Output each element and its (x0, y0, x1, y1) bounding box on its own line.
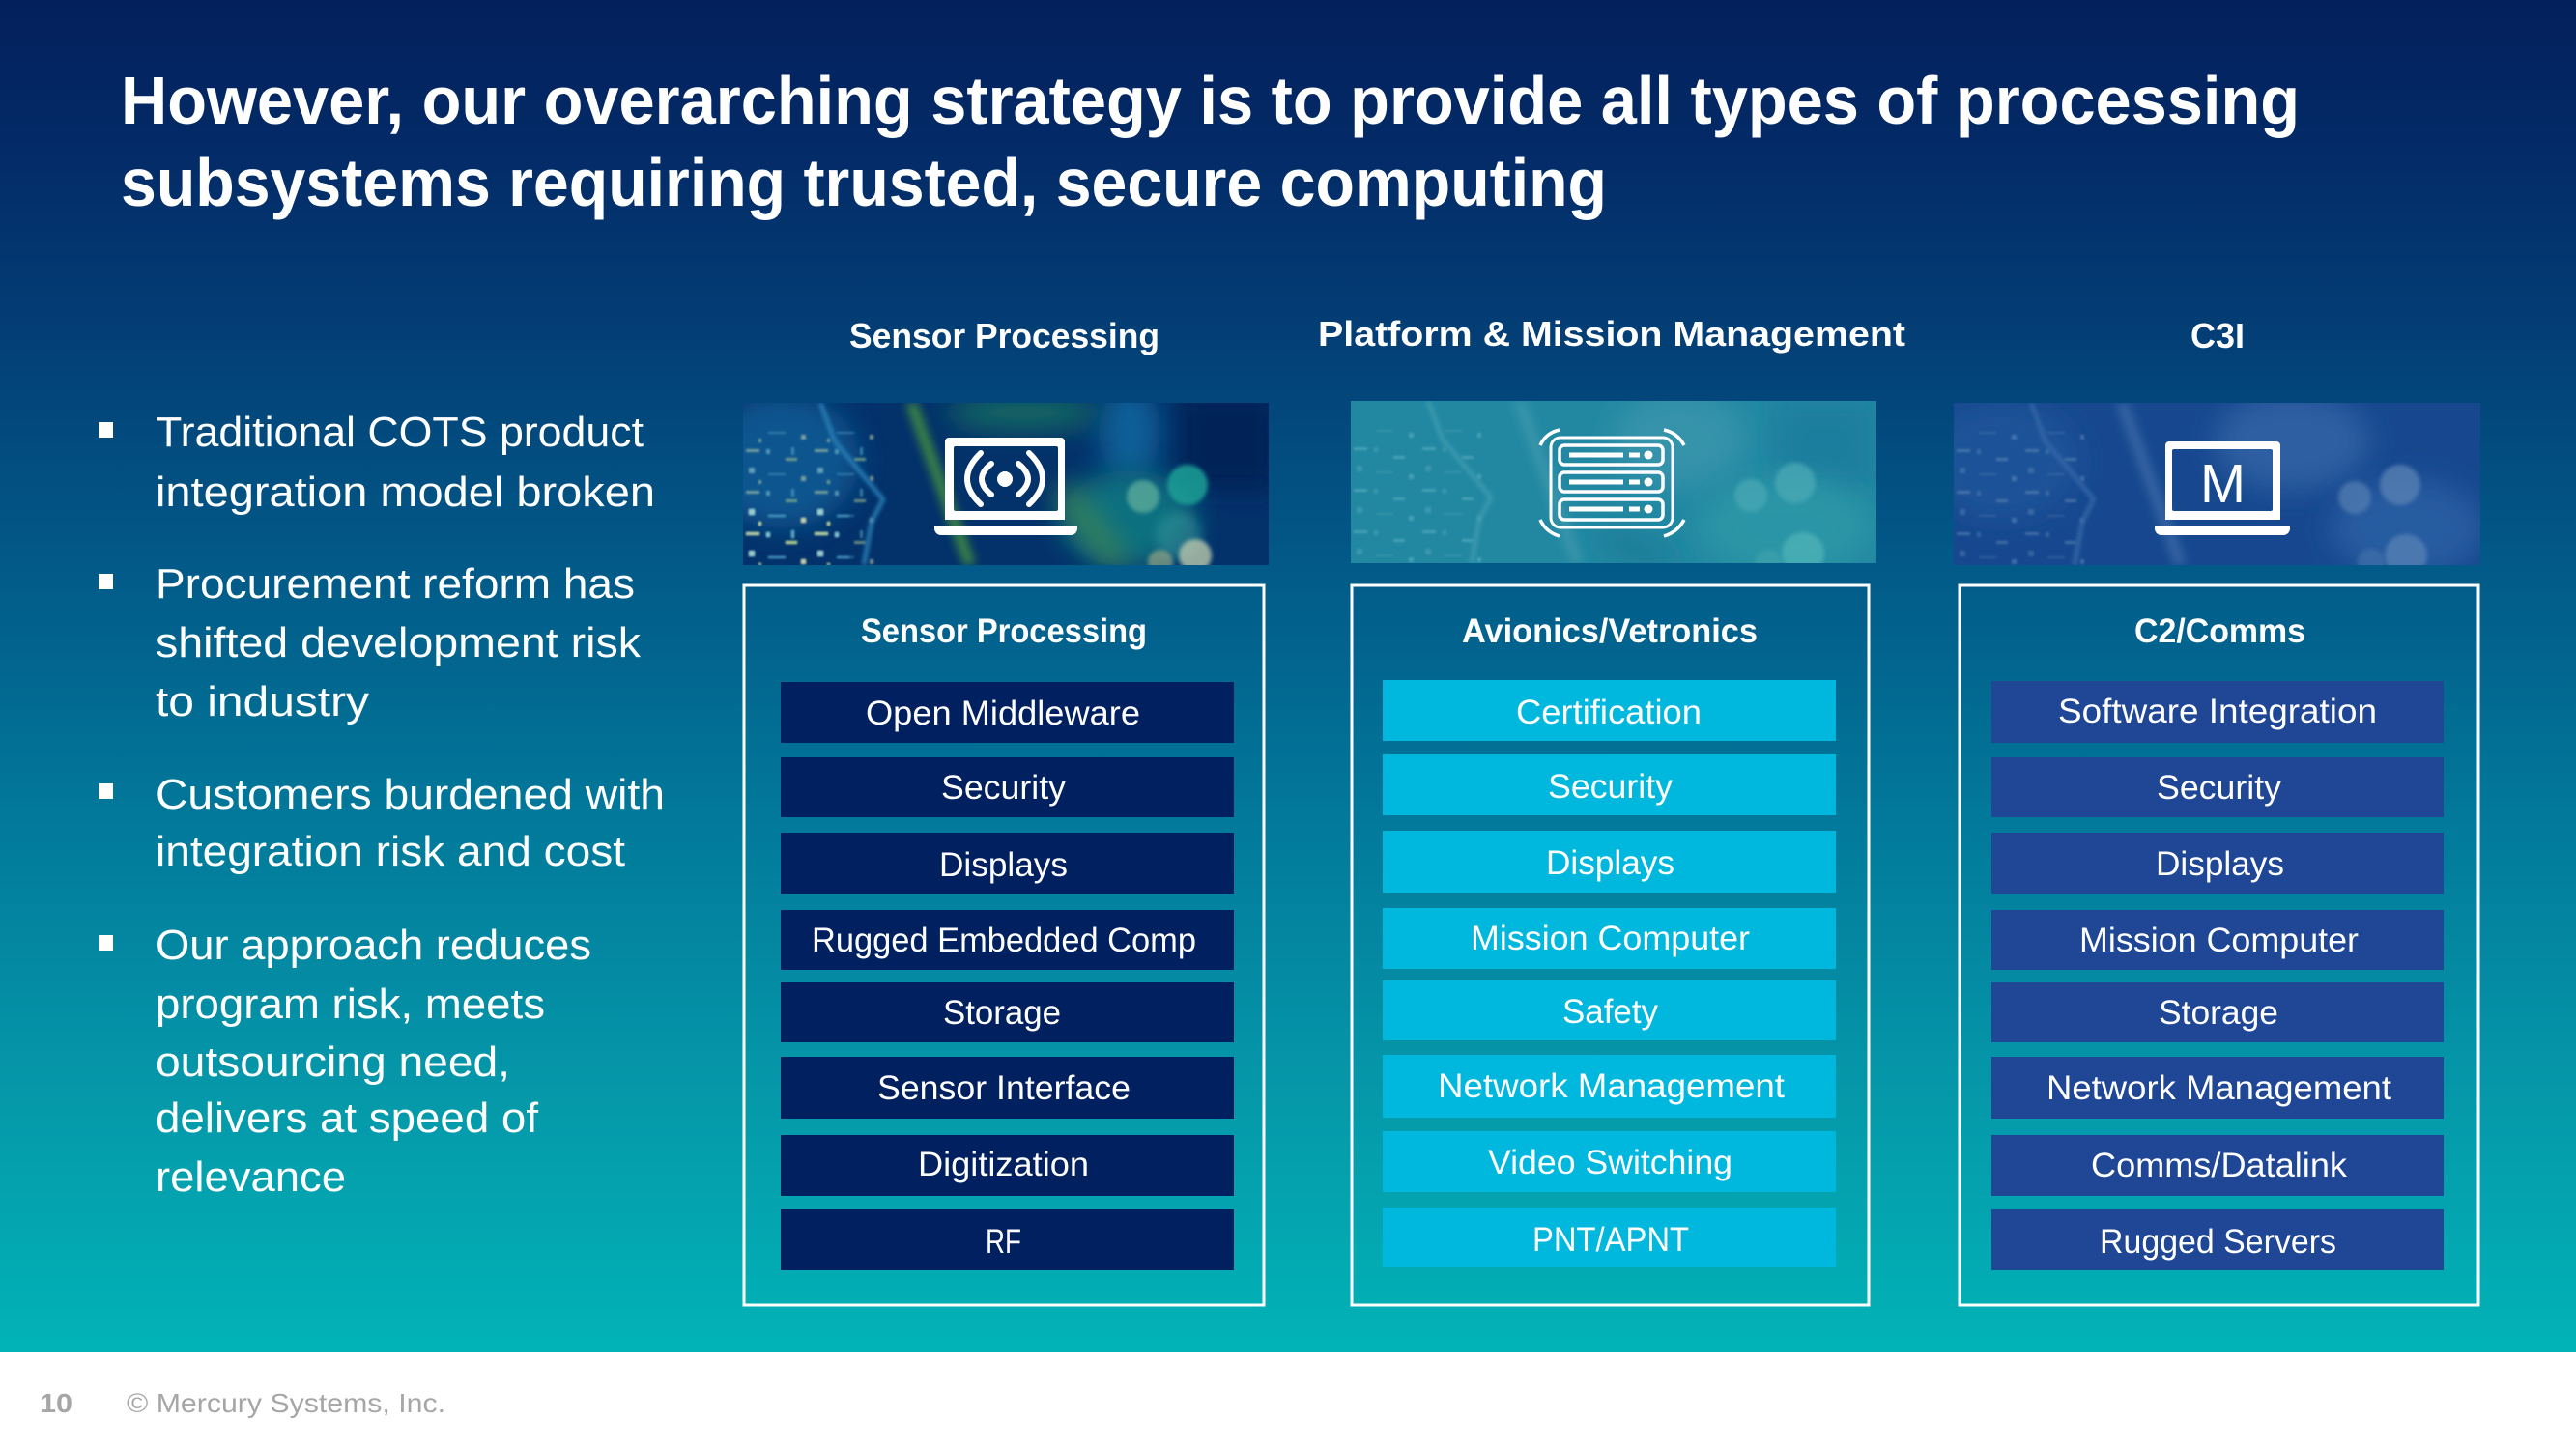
row list: avionics/vetronics: Video Switching (1488, 1144, 1732, 1181)
title: subsystems requiring trusted, secure computing (121, 145, 1607, 220)
row list: C2/Comms: Rugged Servers (2100, 1223, 2336, 1261)
row list: C2/Comms: Storage (2159, 994, 2278, 1032)
row list: sensor processing (781, 682, 1234, 1270)
row list: avionics/vetronics: PNT/APNT (1532, 1221, 1689, 1259)
copyright: © Mercury Systems, Inc. (127, 1388, 445, 1418)
row list: sensor processing: Open Middleware (866, 695, 1140, 732)
row list: C2/Comms: Software Integration (2058, 693, 2377, 730)
banner image: C3I (1954, 403, 2480, 565)
bullet: COTS model (99, 409, 655, 516)
bullet: procurement reform: shifted development risk (156, 619, 642, 667)
row list: avionics/vetronics: Mission Computer (1471, 920, 1750, 957)
bullet: our approach (99, 922, 591, 1201)
bullet: procurement reform (99, 560, 642, 725)
footer (40, 1388, 445, 1418)
icon: laptop with signal (934, 438, 1077, 535)
bullet: our approach: relevance (156, 1153, 346, 1201)
bullet: customers burdened (99, 771, 665, 875)
bullet: procurement reform: Procurement reform has (156, 560, 635, 608)
box outline: sensor processing list (744, 585, 1264, 1305)
row list: avionics/vetronics: Security (1548, 768, 1674, 806)
row list: sensor processing: Rugged Embedded Comp (812, 922, 1196, 959)
heading: platform and mission management: Platform & Mission Management (1318, 314, 1905, 354)
banner image: platform and mission management (1351, 401, 1876, 563)
bullet: customers burdened: integration risk and cost (156, 828, 625, 875)
panel: platform and mission management (1318, 314, 1905, 1305)
bullet: our approach: delivers at speed of (156, 1094, 539, 1142)
bullet: our approach: outsourcing need, (156, 1038, 510, 1086)
bullet: COTS model: integration model broken (156, 469, 655, 516)
row list: avionics/vetronics: Network Management (1438, 1067, 1785, 1105)
row list: C2/Comms: Mission Computer (2079, 922, 2359, 959)
row list: sensor processing: Displays (939, 846, 1068, 884)
box heading: C2/Comms: C2/Comms (2134, 612, 2305, 650)
title: However, our overarching strategy is to provide all types of processing (121, 63, 2300, 138)
row list: sensor processing: Digitization (918, 1146, 1089, 1183)
box outline: C2/Comms list (1960, 585, 2478, 1305)
row list: C2/Comms: Comms/Datalink (2091, 1147, 2348, 1184)
box heading: avionics/vetronics: Avionics/Vetronics (1462, 612, 1758, 650)
row list: sensor processing: Sensor Interface (877, 1069, 1131, 1107)
panel: C3I (1925, 316, 2485, 1305)
title (121, 63, 2300, 220)
row list: avionics/vetronics (1383, 680, 1836, 1267)
icon: laptop with M: M (2200, 453, 2246, 515)
row list: sensor processing: Storage (943, 994, 1061, 1032)
icon: server rack (1540, 430, 1684, 536)
row list: sensor processing: Security (941, 769, 1067, 807)
row list: C2/Comms: Network Management (2046, 1069, 2391, 1107)
bullet: procurement reform: to industry (156, 678, 369, 725)
panel: sensor processing (704, 316, 1278, 1305)
bullet: COTS model: Traditional COTS product (156, 409, 644, 456)
bullet: our approach: Our approach reduces (156, 922, 591, 969)
bullet list (99, 409, 665, 1201)
icon: laptop with M (2155, 441, 2290, 535)
heading: C3I: C3I (2190, 316, 2245, 355)
row list: sensor processing: RF (986, 1223, 1021, 1261)
banner image: sensor processing (743, 403, 1269, 565)
page number: 10 (40, 1388, 72, 1418)
bullet: customers burdened: Customers burdened with (156, 771, 665, 818)
heading: sensor processing: Sensor Processing (849, 316, 1159, 355)
row list: avionics/vetronics: Displays (1546, 844, 1674, 882)
box outline: avionics list (1352, 585, 1869, 1305)
row list: avionics/vetronics: Safety (1562, 993, 1658, 1031)
row list: C2/Comms: Displays (2156, 845, 2284, 883)
row list: C2/Comms: Security (2157, 769, 2282, 807)
row list: avionics/vetronics: Certification (1516, 694, 1702, 731)
bullet: our approach: program risk, meets (156, 980, 545, 1028)
row list: C2/Comms (1991, 681, 2444, 1270)
box heading: sensor processing: Sensor Processing (861, 612, 1147, 650)
